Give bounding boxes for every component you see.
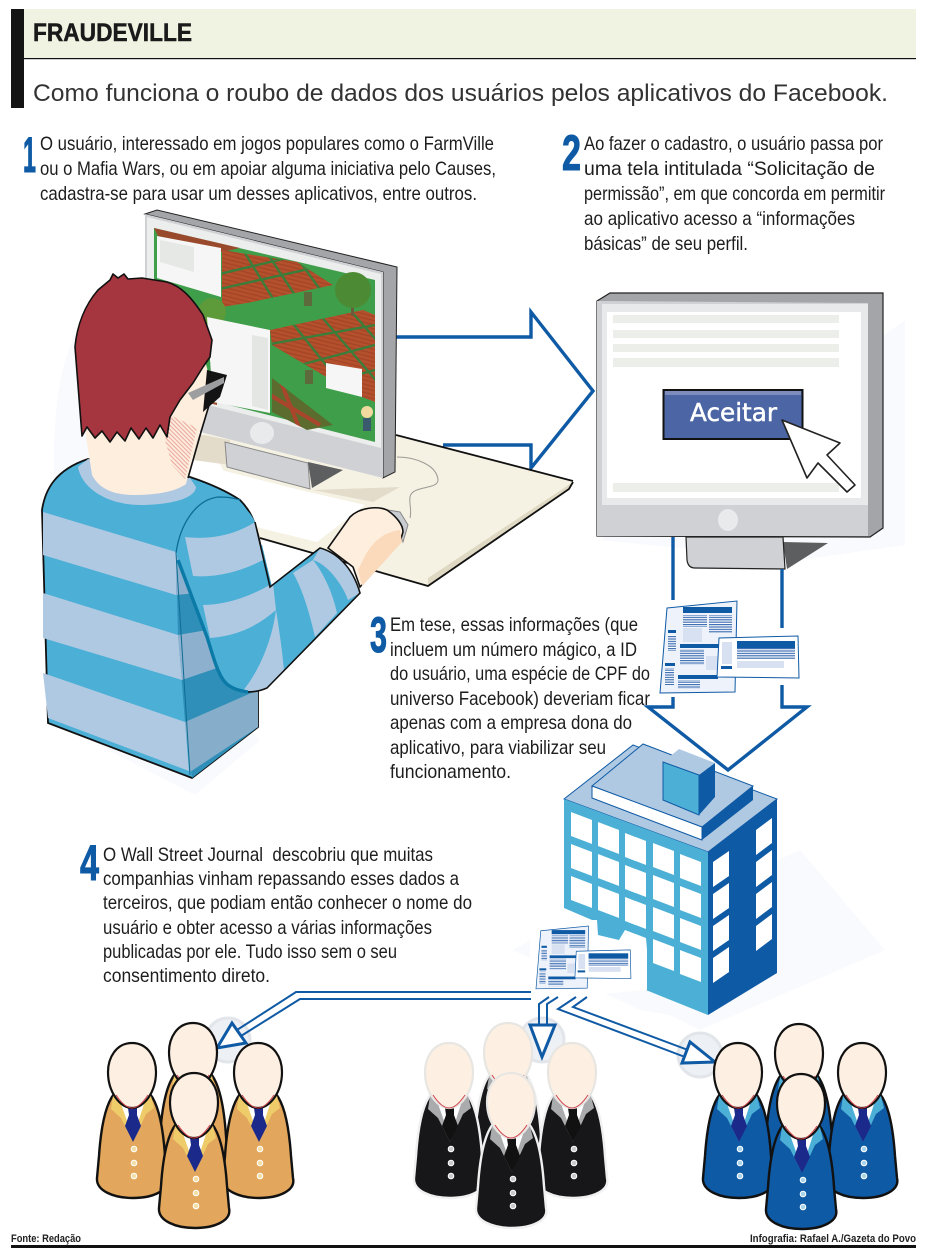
step 4 text: companhias vinham repassando esses dados a	[103, 868, 459, 890]
subtitle: Como funciona o roubo de dados dos usuários pelos aplicativos do Facebook.	[33, 80, 888, 107]
graphic credit: Infografia: Rafael A./Gazeta do Povo	[750, 1233, 916, 1245]
windows	[571, 812, 772, 983]
step 4 text	[80, 835, 472, 987]
step 1 text	[23, 127, 496, 205]
step 3 text: do usuário, uma espécie de CPF do	[390, 663, 650, 685]
header	[11, 9, 916, 108]
step 2 text: uma tela intitulada “Solicitação de	[584, 158, 875, 180]
farmers	[304, 292, 312, 306]
soft background shadows	[54, 280, 905, 1030]
button: Aceitar	[664, 390, 802, 439]
arrow to yellow group	[217, 992, 531, 1048]
man from behind	[42, 274, 408, 778]
arrow: screen to company	[671, 537, 675, 600]
roof cube	[663, 749, 715, 775]
step 4 text: usuário e obter acesso a várias informações	[103, 917, 432, 939]
arrow: user screen to permission screen	[396, 312, 593, 468]
arrow to black group	[530, 997, 558, 1057]
step 2 text	[562, 125, 885, 255]
hand and mouse	[388, 510, 408, 542]
group of people: black	[414, 1023, 607, 1228]
building	[530, 744, 777, 1015]
step 3 text: funcionamento.	[390, 761, 511, 783]
collar	[78, 459, 196, 505]
title: FRAUDEVILLE	[33, 19, 192, 47]
step 4 text: terceiros, que podiam então conhecer o nome do	[103, 892, 472, 914]
arm	[176, 497, 360, 692]
step 1 text: O usuário, interessado em jogos populares como o FarmVille	[40, 133, 494, 155]
tree	[351, 300, 354, 316]
step 3 text: Em tese, essas informações (que	[390, 614, 638, 636]
step 4 text: publicadas por ele. Tudo isso sem o seu	[103, 941, 397, 963]
step 3 text: apenas com a empresa dona do	[390, 712, 632, 734]
step 2 text: básicas” de seu perfil.	[584, 233, 748, 255]
step 3 text: universo Facebook) deveriam ficar	[390, 688, 650, 710]
step 1 text: 1	[23, 127, 36, 183]
step 3 text: 3	[370, 607, 387, 663]
roof slab	[592, 744, 753, 827]
arrow to blue group	[558, 997, 715, 1063]
group of people: blue	[703, 1024, 897, 1229]
step 2 text: permissão”, em que concorda em permitir	[584, 183, 885, 205]
documents at company	[536, 926, 631, 989]
step 2 text: Ao fazer o cadastro, o usuário passa por	[584, 133, 883, 155]
game panels	[157, 236, 221, 297]
mouse cord	[397, 457, 438, 518]
step 1 text: ou o Mafia Wars, ou em apoiar alguma iniciativa pelo Causes,	[40, 158, 496, 180]
step 4 text: 4	[80, 835, 99, 891]
documents	[660, 601, 799, 693]
desk	[193, 420, 573, 586]
step 2 text: ao aplicativo acesso a “informações	[584, 208, 855, 230]
step 4 text: O Wall Street Journal descobriu que muitas	[103, 844, 433, 866]
step 1 text: cadastra-se para usar um desses aplicativos, entre outros.	[40, 183, 477, 205]
arrow shaft right	[780, 569, 784, 628]
target rings	[206, 1018, 722, 1077]
glasses	[203, 370, 227, 412]
button: Aceitar: Aceitar	[690, 398, 778, 427]
group of people: yellow	[97, 1023, 293, 1228]
step 3 text: aplicativo, para viabilizar seu	[390, 737, 606, 759]
monitor: permission screen	[597, 293, 883, 569]
arrow head: company	[648, 685, 807, 770]
hair	[75, 274, 212, 442]
game screen	[154, 228, 385, 442]
neck and face	[85, 360, 213, 495]
source credit: Fonte: Redação	[11, 1233, 81, 1245]
step 2 text: 2	[562, 125, 581, 181]
torso	[42, 459, 270, 778]
monitor: FarmVille game	[145, 210, 397, 489]
step 4 text: consentimento direto.	[103, 965, 270, 987]
step 3 text: incluem um número mágico, a ID	[390, 639, 637, 661]
icon: cursor	[782, 420, 855, 492]
step 3 text	[370, 607, 650, 783]
